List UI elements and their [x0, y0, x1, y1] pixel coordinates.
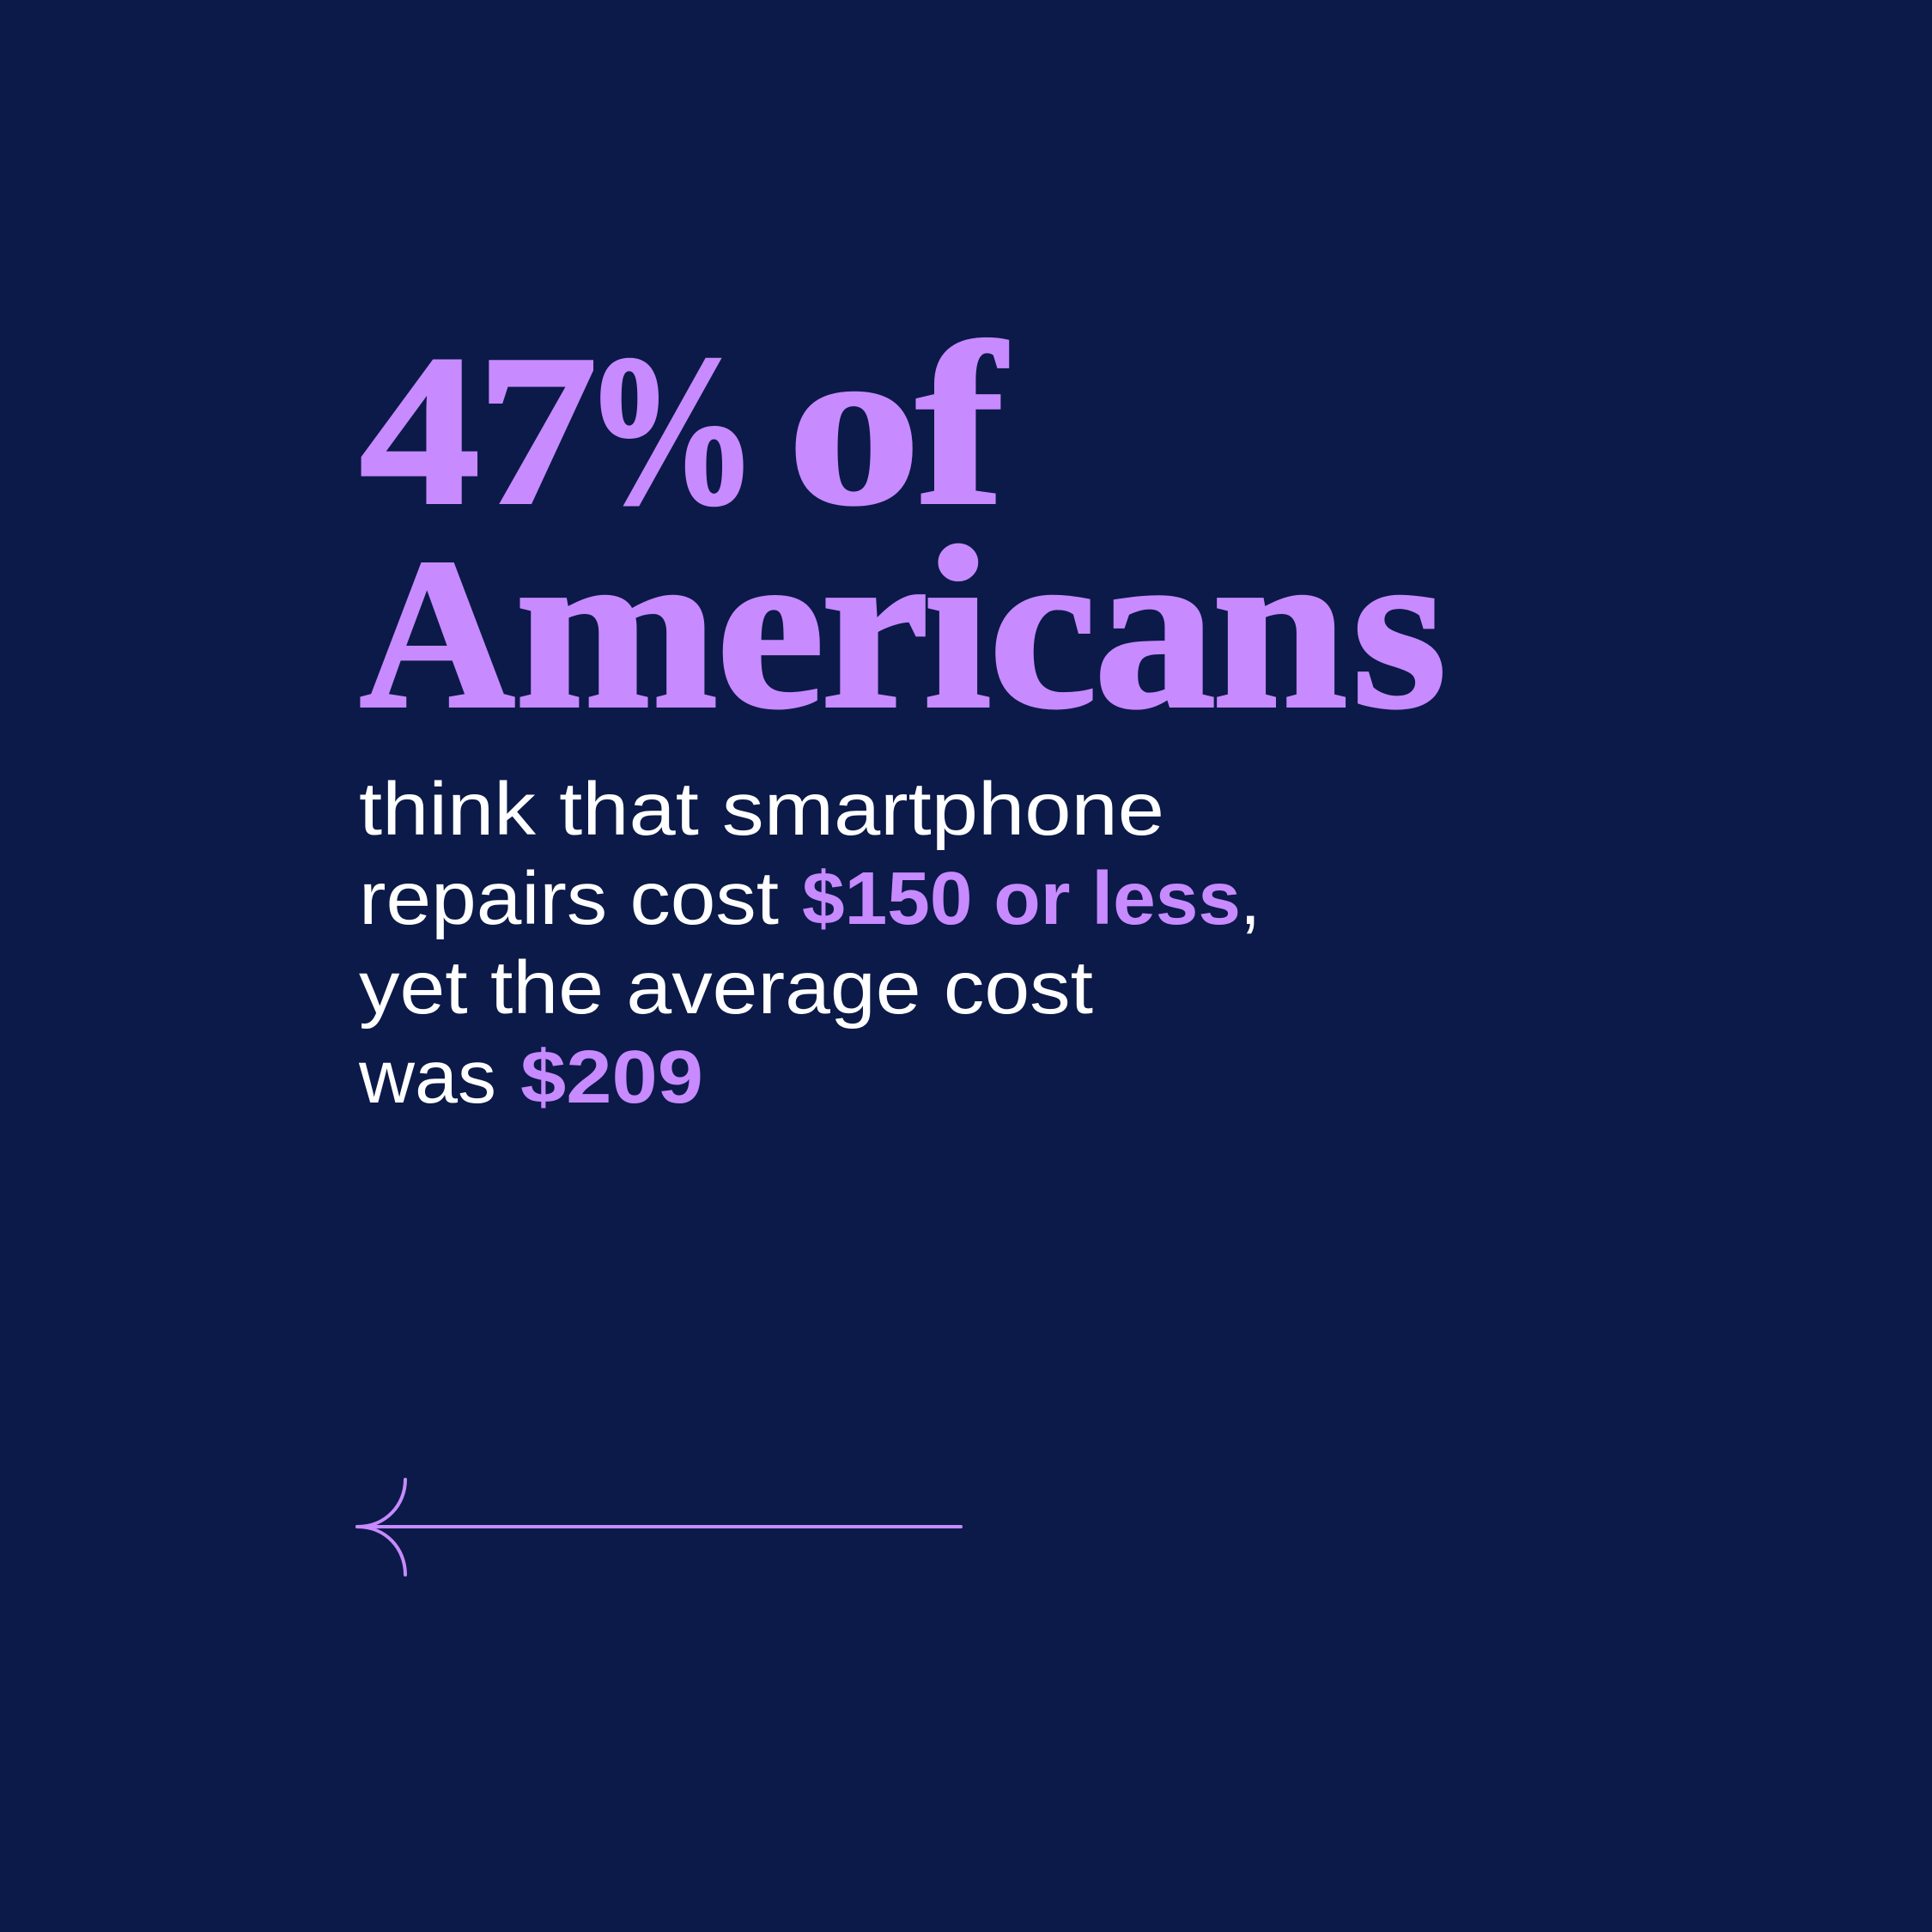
body line 2: repairs cost: [359, 857, 779, 940]
comma: ,: [1240, 857, 1261, 940]
title rest of word: mericans: mericans: [515, 499, 1447, 756]
title word: of: of: [787, 296, 1007, 552]
body line 1: think that smartphone: [359, 768, 1164, 851]
body line 3: yet the average cost: [359, 946, 1093, 1030]
arrow pointing left: [357, 1479, 961, 1575]
title capital A: A: [360, 515, 515, 753]
title percent sign: %: [584, 312, 758, 550]
title: 47% of Americans: [360, 296, 1447, 756]
highlight: $150 or less: $150 or less: [802, 857, 1241, 940]
body line 4: was: [358, 1036, 496, 1119]
title number: 47: 47: [360, 312, 598, 550]
highlight: $209: $209: [520, 1036, 703, 1119]
body text block: [358, 768, 1261, 1119]
